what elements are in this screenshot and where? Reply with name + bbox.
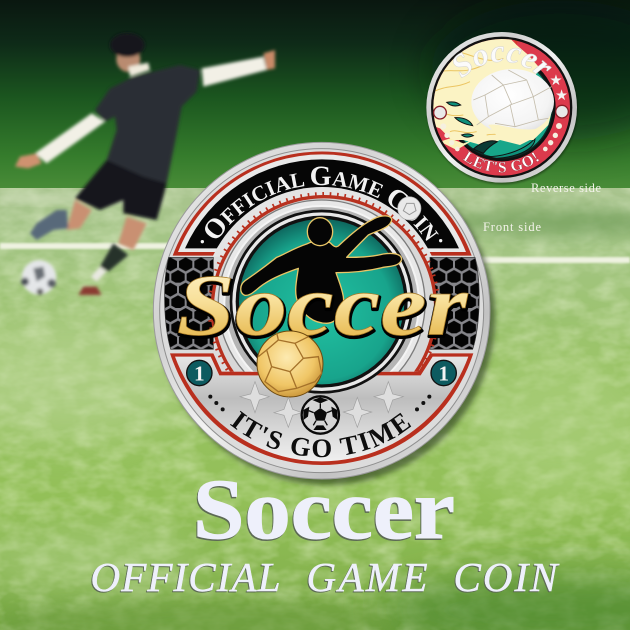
stars on red band: ★ [555,87,568,104]
numeral badge left [187,360,212,386]
hexagon panel left [165,257,213,349]
bottom arc text: IT'S GO TIME [230,410,412,458]
gold italic Soccer: Soccer [177,259,470,357]
reverse coin motto: LET'S GO! [462,150,539,173]
side gems [434,105,568,119]
white dots on band [440,123,562,151]
silver stars [240,382,403,427]
background: mottled grass texture [0,188,630,630]
band dots [201,239,442,243]
left arm sleeve [15,113,105,168]
flames [433,39,552,158]
kicking leg [30,200,92,240]
stars on red band [549,72,568,104]
numeral badge right [431,360,456,386]
teal enamel medallion [231,211,412,392]
subheading: OFFICIAL GAME COIN: GAME [306,554,428,600]
dots left [208,395,225,411]
hexagon panel right [430,257,479,349]
silver arch under band [213,187,432,256]
subheading: OFFICIAL GAME COIN [90,554,560,601]
coin shadow [158,148,495,485]
red band inner ring [449,55,554,160]
silver rim [153,142,490,479]
numeral badge right: 1 [438,362,449,386]
reverse side coin [426,32,578,186]
player kicking the ball (blurred photo) [15,33,275,295]
silver ball over the C [398,197,421,220]
red band [433,39,570,176]
inner silver face [160,149,484,473]
black edge ring [431,37,572,178]
subheading: OFFICIAL GAME COIN: OFFICIAL [90,554,280,600]
reverse coin italic word: Soccer [453,46,552,78]
background: dark blurred trees [0,0,630,195]
label: front side: Front side [483,220,541,234]
top band arc text: OFFICIAL GAME COIN [205,166,439,241]
ball on the grass [21,260,56,295]
medallion rings [208,192,439,372]
standing leg [78,217,147,295]
heading: Soccer: Soccer [193,461,455,557]
bottom silver segment with red border [170,353,473,465]
gold italic Soccer: Soccer [177,257,469,355]
shorts [75,160,167,220]
shirt [95,65,200,183]
coin shadow [427,34,578,184]
background: field lines and lighting [0,194,630,630]
dots right [415,395,431,411]
subheading: OFFICIAL GAME COIN: GAME [306,555,426,601]
right arm sleeve [202,50,275,87]
front side coin [152,142,498,489]
numeral badge left: 1 [194,362,205,386]
stars on red band: ★ [549,72,562,89]
head and collar [110,33,150,77]
subheading: OFFICIAL GAME COIN: OFFICIAL [90,555,280,601]
top band with red border [173,151,472,256]
background: darker right side of the trees [430,0,630,140]
subheading: OFFICIAL GAME COIN: COIN [454,554,560,600]
heading: Soccer: Soccer [192,462,454,558]
silver rim [426,32,577,183]
background: grass field [0,188,630,630]
subheading: OFFICIAL GAME COIN: COIN [452,555,559,601]
soccer ball relief [471,69,554,140]
gold soccer ball [257,331,323,397]
black outlined soccer ball [302,396,339,434]
kicking player silhouette [241,216,402,323]
label: reverse side: Reverse side [531,181,601,195]
